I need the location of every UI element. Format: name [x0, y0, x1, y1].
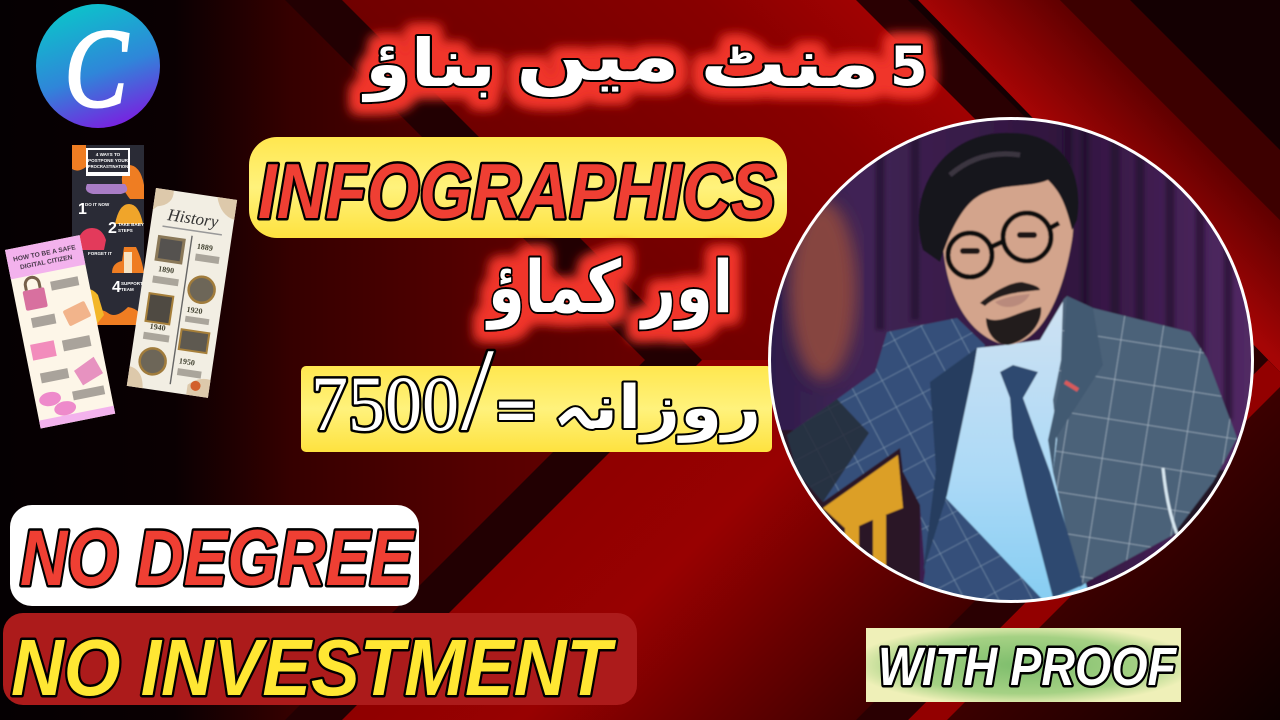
hair [919, 133, 1078, 262]
sample card: procrastination [72, 145, 144, 325]
shirt [943, 298, 1090, 600]
sample card: history timeline: 1890 [158, 264, 175, 275]
badge: NO INVESTMENT: NO INVESTMENT [11, 623, 617, 712]
sample card: procrastination: FORGET IT [88, 251, 112, 256]
dark lapel, left side [923, 348, 977, 572]
face [943, 165, 1073, 345]
badge: WITH PROOF: WITH PROOF [878, 637, 1178, 697]
heading: Urdu, make in 5 minutes [362, 15, 928, 103]
sample card: procrastination: 2 [108, 220, 117, 237]
eyes [963, 235, 1034, 251]
lips [995, 294, 1030, 307]
sample card: history timeline: 1889 [196, 242, 213, 253]
infographic samples [5, 145, 237, 428]
sample card: procrastination: TEAM [121, 287, 134, 292]
sample card: history timeline: 1950 [178, 356, 196, 368]
sample card: safe digital citizen: HOW TO BE A SAFE [13, 244, 77, 263]
badge: daily 7500: / [461, 324, 494, 455]
heading: Urdu, make in 5 minutes: بناؤ [362, 25, 496, 103]
glasses [948, 213, 1059, 277]
badge: daily 7500 [301, 324, 772, 455]
badge: daily 7500: 7500 [311, 360, 459, 447]
heading: Urdu, make in 5 minutes: 5 [890, 35, 928, 98]
jacket left side [787, 318, 1043, 606]
jacket right side [1053, 296, 1237, 587]
chair [823, 455, 903, 570]
tie [1000, 365, 1083, 598]
badge: daily 7500: = [493, 378, 539, 441]
sample card: history timeline: 1920 [186, 305, 203, 316]
sample card: procrastination: 3 [74, 254, 83, 271]
sample card: procrastination: 4 [112, 279, 121, 296]
sample card: history timeline: History [165, 205, 220, 231]
sample card: procrastination: POSTPONE YOUR [88, 158, 129, 163]
icon: Canva logo [36, 4, 160, 131]
badge: INFOGRAPHICS: INFOGRAPHICS [258, 147, 776, 235]
sample card: procrastination: STEPS [118, 228, 133, 233]
sample card: history timeline: 1940 [149, 322, 166, 333]
sample card: history timeline [127, 188, 237, 398]
Urdu text: and earn: اور کماؤ [486, 245, 733, 330]
sample card: procrastination: PROCRASTINATION [88, 164, 128, 169]
mustache [980, 282, 1040, 306]
goatee [986, 307, 1041, 345]
sample card: safe digital citizen [5, 235, 115, 428]
lapel pin [1065, 382, 1078, 390]
sample card: procrastination: SUPPORT [121, 281, 143, 286]
heading: Urdu, make in 5 minutes: میں [516, 15, 680, 97]
sample card: procrastination: TAKE BABY [118, 222, 144, 227]
sample card: procrastination: 4 WAYS TO [96, 152, 121, 157]
lapel [1048, 296, 1103, 472]
icon: Canva logo: C [65, 7, 128, 131]
badge: NO DEGREE: NO DEGREE [20, 513, 415, 602]
curtain backdrop [771, 120, 1251, 588]
sample card: safe digital citizen: DIGITAL CITIZEN [19, 254, 73, 271]
sample card: procrastination: DO IT NOW [85, 202, 110, 207]
badge: daily 7500: روزانہ [553, 373, 761, 443]
hair highlight [950, 154, 1020, 175]
sample card: procrastination: 1 [78, 201, 87, 218]
heading: Urdu, make in 5 minutes: منٹ [700, 25, 880, 102]
portrait photo [760, 110, 1265, 610]
shirt sliver, right side [1163, 468, 1177, 534]
